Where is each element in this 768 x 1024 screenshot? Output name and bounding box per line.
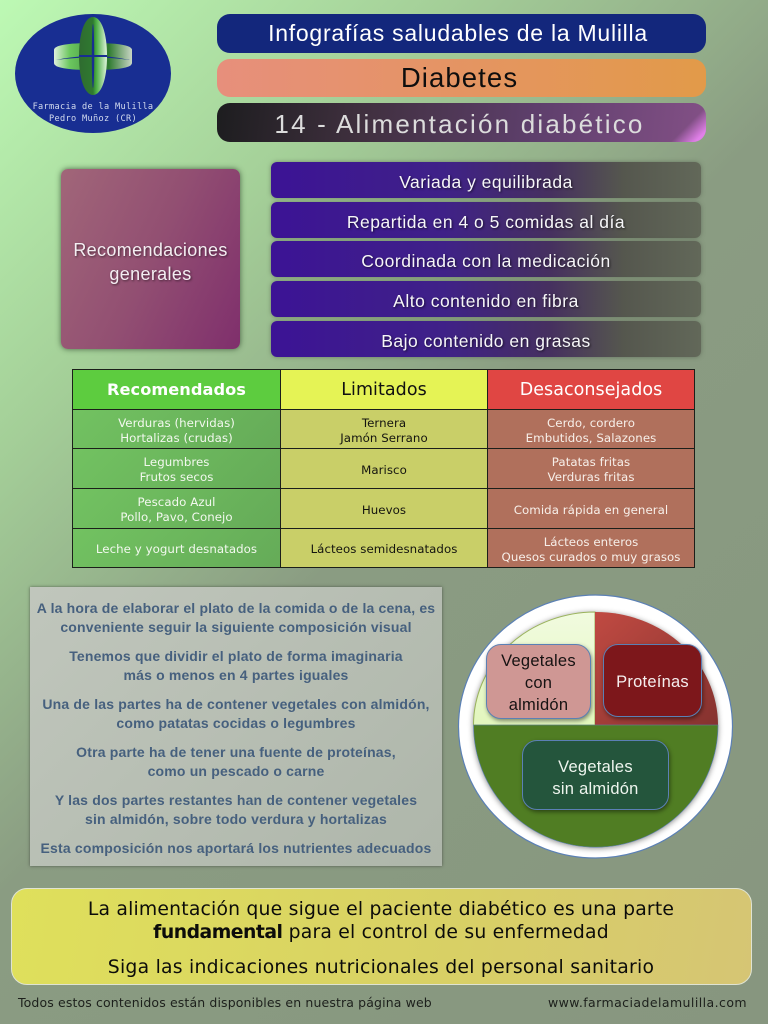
table: alimentos: Hortalizas (crudas) bbox=[120, 430, 233, 444]
table: alimentos: Pollo, Pavo, Conejo bbox=[120, 510, 233, 524]
table: alimentos: Leche y yogurt desnatados bbox=[96, 542, 257, 556]
item 1 bbox=[271, 162, 701, 198]
label: vegetales con almidón bbox=[486, 644, 591, 719]
table: alimentos: Ternera bbox=[362, 416, 406, 430]
title: Alimentación diabético bbox=[217, 103, 706, 142]
label: vegetales con almidón: almidón bbox=[509, 696, 568, 714]
callout: conclusión bbox=[11, 888, 752, 985]
quarter: vegetales con almidón bbox=[474, 612, 595, 725]
title: Infografías bbox=[217, 14, 706, 53]
label: proteínas bbox=[603, 644, 702, 717]
header: recomendados bbox=[72, 369, 281, 410]
item 2: Repartida en 4 o 5 comidas al día bbox=[347, 212, 625, 232]
label: proteínas: Proteínas bbox=[616, 672, 689, 690]
table: alimentos: Quesos curados o muy grasos bbox=[501, 550, 681, 564]
text block: paragraphs: Tenemos que dividir el plato de forma imaginaria bbox=[69, 648, 403, 664]
list: recomendaciones bbox=[268, 160, 703, 360]
table: alimentos: Lácteos enteros bbox=[544, 534, 638, 548]
table: alimentos: Pescado Azul bbox=[138, 495, 215, 509]
header: desaconsejados bbox=[487, 369, 695, 410]
item 1: Variada y equilibrada bbox=[399, 172, 573, 192]
table: alimentos: Comida rápida en general bbox=[514, 502, 668, 516]
text block: paragraphs: más o menos en 4 partes iguales bbox=[124, 667, 348, 683]
label: vegetales sin almidón bbox=[522, 740, 669, 810]
panel: recomendaciones generales: generales bbox=[109, 264, 192, 284]
table: alimentos: Huevos bbox=[362, 502, 406, 516]
text block: paragraphs: A la hora de elaborar el plato de la comida o de la cena, es bbox=[37, 600, 435, 616]
label: vegetales con almidón: Vegetales bbox=[501, 652, 576, 670]
chart: plate diagram bbox=[458, 594, 734, 859]
table: alimentos bbox=[72, 369, 695, 568]
text block: paragraphs: como un pescado o carne bbox=[148, 763, 324, 779]
table: alimentos: Lácteos semidesnatados bbox=[311, 542, 457, 556]
logo: Pedro Muñoz (CR) bbox=[49, 114, 137, 124]
title: Infografías: Infografías saludables de la Mulilla bbox=[268, 20, 648, 46]
title: Alimentación diabético: 14 - Alimentación diabético bbox=[274, 108, 645, 138]
label: vegetales sin almidón: sin almidón bbox=[552, 780, 639, 798]
table: alimentos: Legumbres bbox=[143, 455, 210, 469]
logo text: Farmacia de la Mulilla bbox=[33, 102, 153, 112]
table: alimentos: Jamón Serrano bbox=[340, 430, 428, 444]
text block: paragraphs: Y las dos partes restantes han de contener vegetales bbox=[55, 792, 417, 808]
half: vegetales sin almidón bbox=[474, 725, 718, 847]
text block: paragraphs bbox=[37, 600, 435, 856]
table: alimentos: Frutos secos bbox=[140, 470, 213, 484]
footer: right: www.farmaciadelamulilla.com bbox=[548, 995, 747, 1010]
panel: composición del plato text bbox=[30, 587, 442, 866]
item 2 bbox=[271, 202, 701, 238]
text block: paragraphs: Otra parte ha de tener una fuente de proteínas, bbox=[76, 744, 396, 760]
title: Diabetes: Diabetes bbox=[401, 62, 518, 93]
table: alimentos: Cerdo, cordero bbox=[547, 416, 635, 430]
item 5: Bajo contenido en grasas bbox=[381, 330, 591, 350]
header: limitados: Limitados bbox=[341, 380, 427, 400]
footer: left: Todos estos contenidos están disponibles en nuestra página web bbox=[18, 995, 432, 1010]
table: alimentos: Verduras (hervidas) bbox=[118, 416, 235, 430]
text block: paragraphs: Esta composición nos aportará los nutrientes adecuados bbox=[41, 840, 431, 856]
table: alimentos: Embutidos, Salazones bbox=[526, 430, 656, 444]
header: limitados bbox=[280, 369, 488, 410]
table: alimentos: Verduras fritas bbox=[547, 470, 635, 484]
callout text: fundamental para el control de su enfermedad bbox=[153, 922, 609, 943]
label: vegetales sin almidón: Vegetales bbox=[558, 758, 633, 776]
callout text: La alimentación que sigue el paciente diabético es una parte bbox=[88, 899, 674, 920]
item 4 bbox=[271, 281, 701, 317]
table: alimentos: Marisco bbox=[361, 462, 407, 476]
item 5 bbox=[271, 321, 701, 357]
text block: paragraphs: Una de las partes ha de contener vegetales con almidón, bbox=[42, 696, 430, 712]
header: recomendados: Recomendados bbox=[107, 380, 246, 399]
item 4: Alto contenido en fibra bbox=[393, 290, 579, 310]
label: vegetales con almidón: con bbox=[525, 674, 552, 692]
table: alimentos: Patatas fritas bbox=[552, 455, 630, 469]
title: Diabetes bbox=[217, 59, 706, 97]
item 3 bbox=[271, 241, 701, 277]
icon: green cross of ribbons bbox=[54, 17, 132, 95]
logo bbox=[15, 14, 171, 133]
text block: paragraphs: sin almidón, sobre todo verdura y hortalizas bbox=[85, 811, 387, 827]
panel: recomendaciones generales bbox=[61, 169, 240, 349]
text block: paragraphs: como patatas cocidas o legumbres bbox=[116, 715, 356, 731]
callout text bbox=[88, 899, 674, 943]
callout text 2: Siga las indicaciones nutricionales del personal sanitario bbox=[108, 957, 654, 978]
text block: paragraphs: conveniente seguir la siguiente composición visual bbox=[60, 619, 412, 635]
header: desaconsejados: Desaconsejados bbox=[520, 380, 662, 400]
quarter: proteínas bbox=[595, 612, 718, 725]
panel: recomendaciones generales: Recomendaciones bbox=[73, 240, 228, 260]
item 3: Coordinada con la medicación bbox=[361, 250, 611, 270]
